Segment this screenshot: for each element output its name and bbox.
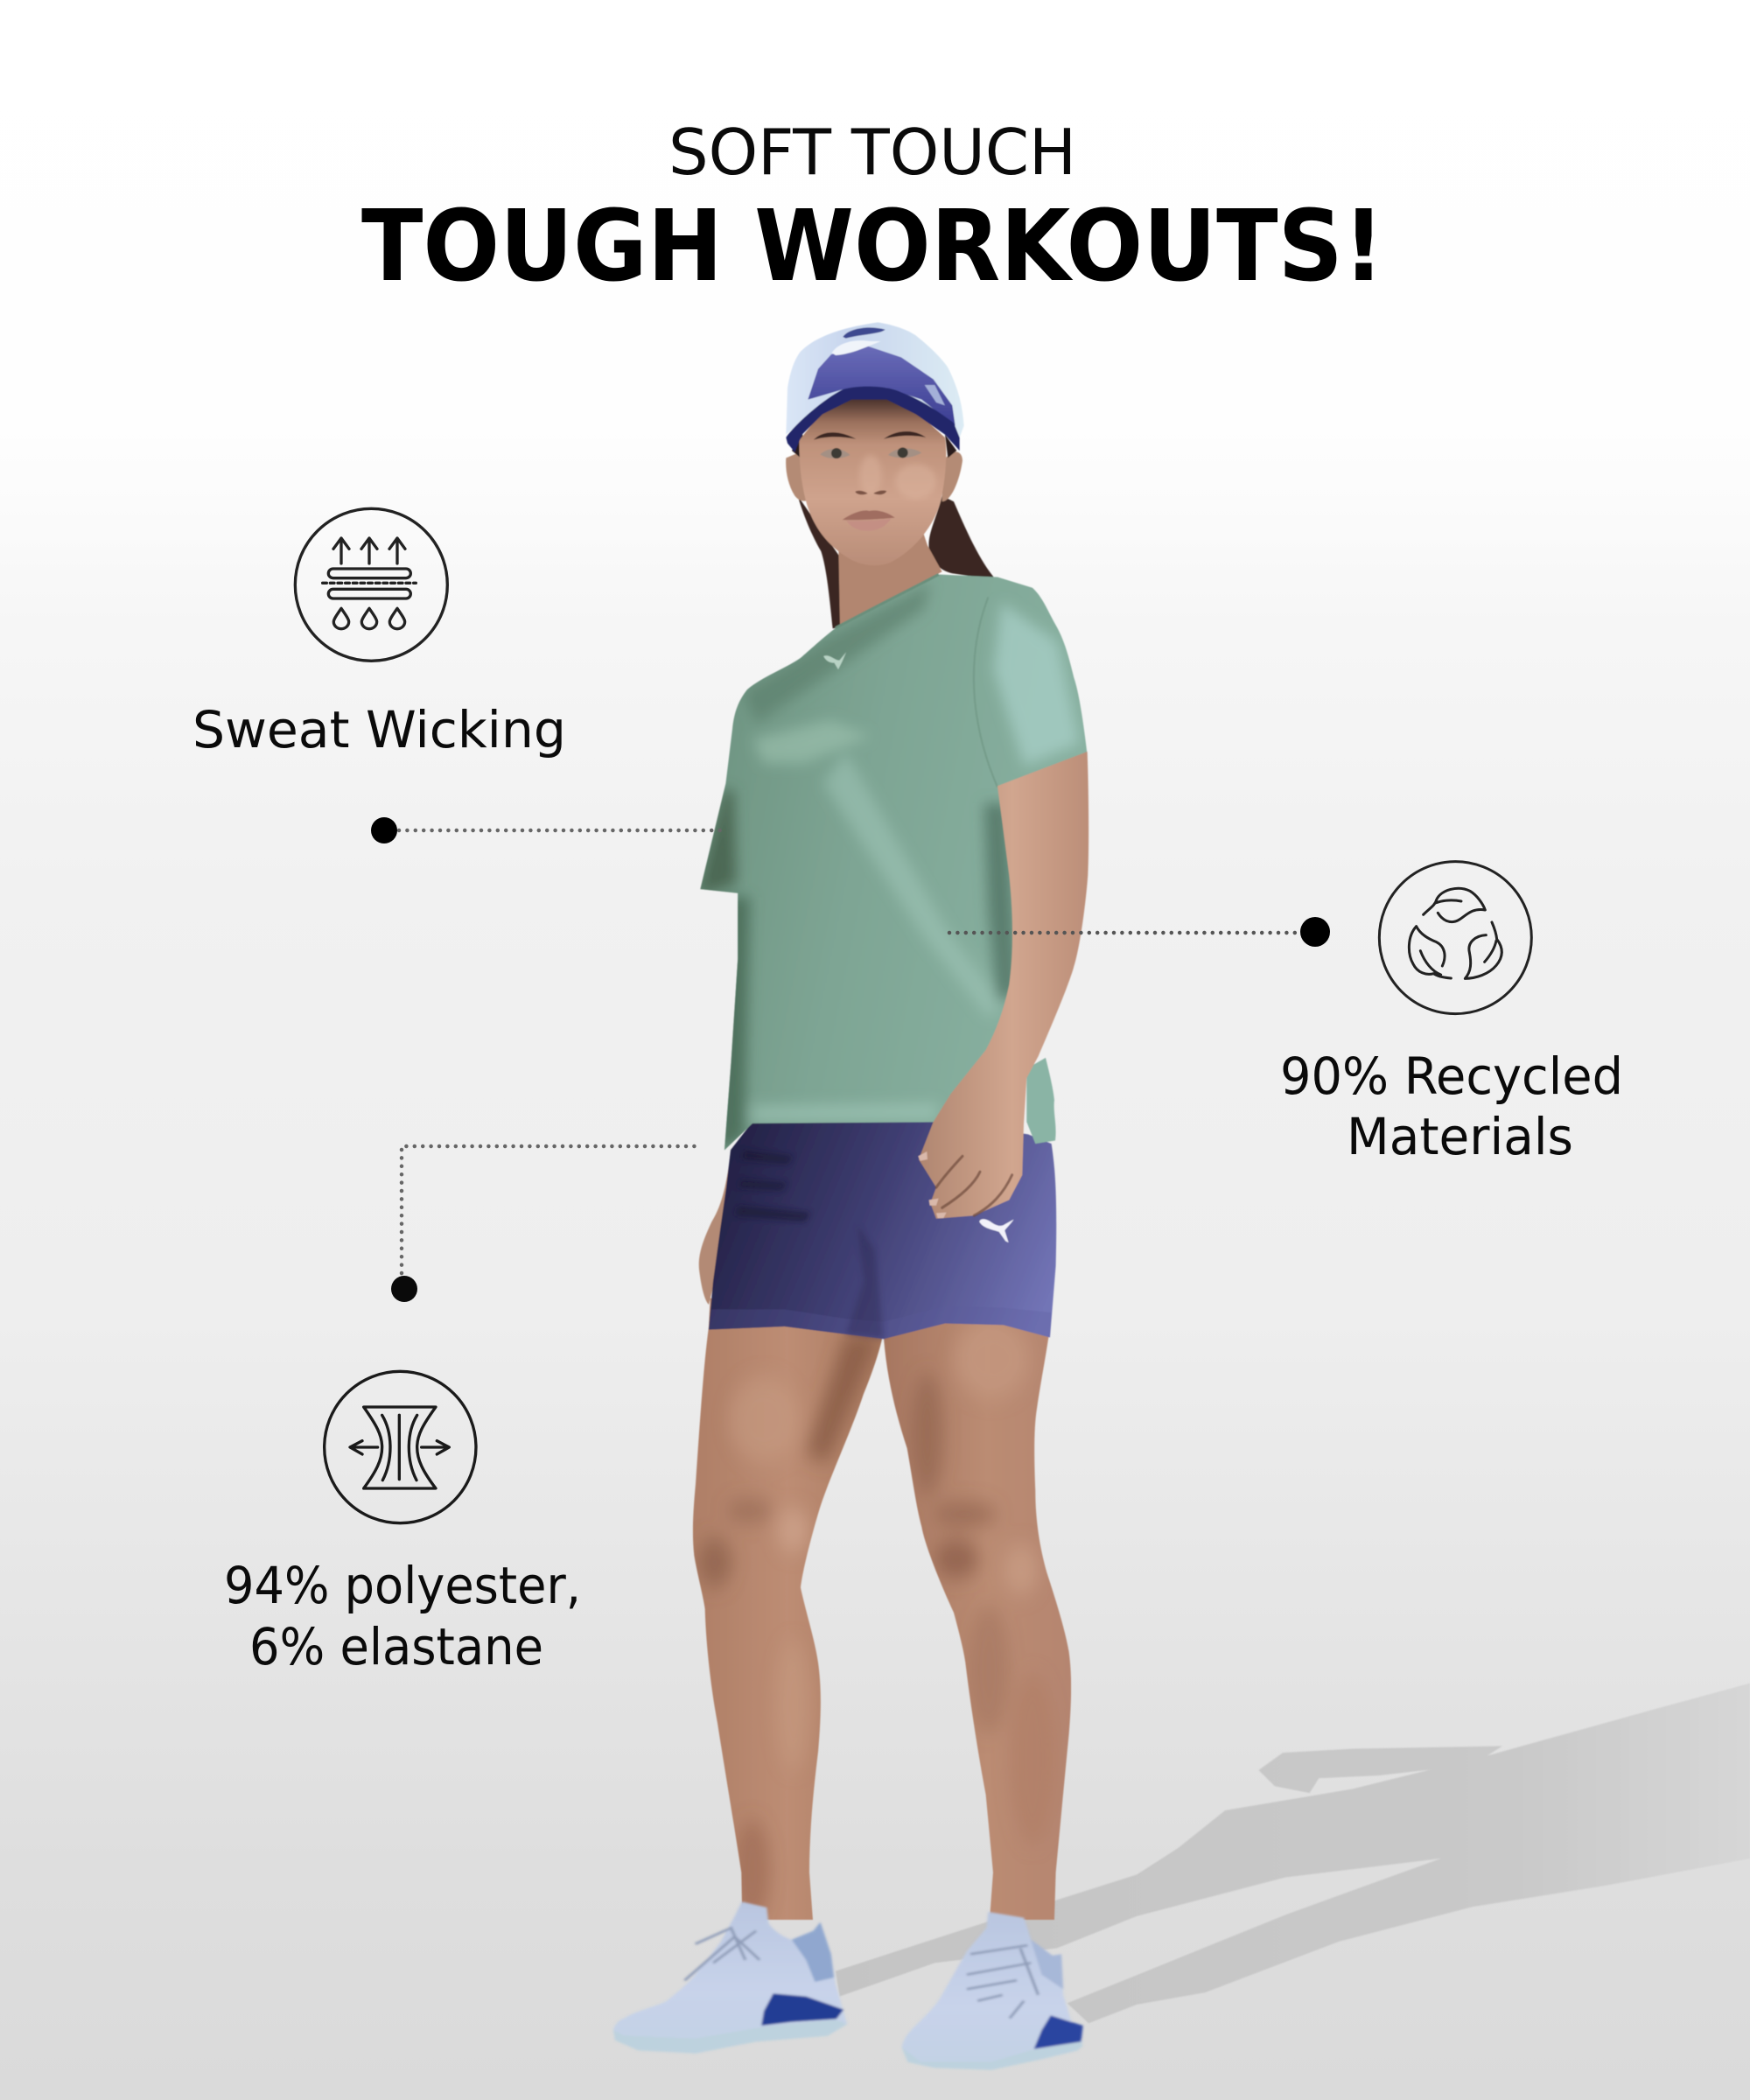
shirt tail behind arm <box>1026 1058 1056 1144</box>
cheek light <box>895 464 936 499</box>
knee crease <box>934 1503 998 1526</box>
chest highlight <box>752 720 871 763</box>
dotted line <box>399 829 723 832</box>
knee shadow <box>697 1537 732 1587</box>
shorts logo <box>979 1219 1014 1242</box>
label: sweat wicking: Sweat Wicking <box>192 700 566 760</box>
right iris <box>898 447 908 458</box>
arm <box>919 752 1088 1219</box>
nostrils <box>855 491 886 494</box>
second line: Materials <box>1347 1107 1573 1166</box>
left body shade <box>717 897 750 1152</box>
right leg base <box>881 1292 1074 1927</box>
back hand <box>699 1156 731 1305</box>
left shoe collar <box>792 1922 834 1982</box>
cap blue panel <box>808 346 956 426</box>
lower shin shadow <box>737 1822 772 1906</box>
eyebrows <box>814 431 926 440</box>
cap top logo <box>843 327 886 339</box>
dot marker <box>371 817 397 844</box>
icon: recycled leaves <box>1379 862 1531 1014</box>
cap dome <box>786 322 964 438</box>
thigh inner shadow <box>912 1373 943 1494</box>
second line: 6% elastane <box>249 1617 543 1676</box>
eyes <box>820 447 921 458</box>
lower lip <box>846 519 891 531</box>
inner thigh shadow <box>805 1334 881 1462</box>
nose highlight <box>859 455 882 496</box>
right leg <box>881 1292 1074 1927</box>
title line: tough workouts: TOUGH WORKOUTS! <box>361 190 1384 304</box>
left shoe sole <box>613 2020 847 2054</box>
icon: sweat wicking <box>295 508 447 661</box>
finger lines <box>936 1156 1012 1215</box>
left sleeve shade <box>696 790 737 897</box>
calf shade <box>970 1610 1008 1729</box>
knee shadow <box>934 1539 978 1578</box>
dotted line <box>949 931 1304 934</box>
right shoe <box>902 1912 1083 2070</box>
shirt chest logo <box>823 652 846 669</box>
arm and hand <box>918 752 1088 1219</box>
lower calf tone <box>1023 1746 1024 1773</box>
right shoe heel insert <box>1034 2015 1083 2049</box>
shorts leg gap <box>846 1225 884 1339</box>
dot marker <box>1300 917 1330 947</box>
shorts <box>709 1120 1056 1339</box>
knee crease <box>726 1499 773 1522</box>
floor shadow <box>836 1684 1750 2023</box>
model figure <box>613 322 1088 2070</box>
left shoe <box>613 1901 847 2054</box>
face <box>799 398 946 565</box>
shorts hem tone <box>709 1306 1052 1339</box>
left shoe heel insert <box>761 1993 844 2026</box>
finger nails <box>918 1152 947 1218</box>
shirt folds <box>696 583 1079 1152</box>
left shoe laces <box>684 1928 760 1980</box>
thigh highlight <box>956 1328 1024 1390</box>
left shoe upper <box>613 1901 847 2054</box>
right shoe collar <box>1024 1918 1063 1989</box>
shorts waist folds <box>735 1150 811 1222</box>
right shoe upper <box>902 1912 1083 2069</box>
cap brim <box>786 387 960 452</box>
knee highlight <box>777 1509 809 1551</box>
neck <box>838 528 942 628</box>
right shoe sole <box>902 2041 1083 2070</box>
diagonal fold <box>823 752 1003 1018</box>
head and cap <box>786 322 964 565</box>
sleeve seam <box>974 598 998 788</box>
title <box>361 116 1384 304</box>
first line: 90% Recycled <box>1280 1046 1623 1106</box>
first line: 94% polyester, <box>224 1556 581 1615</box>
icon: fabric stretch <box>325 1371 476 1523</box>
upper shadow <box>743 583 931 723</box>
right eye <box>888 448 921 458</box>
hem highlight <box>752 1103 937 1122</box>
cap white print <box>832 340 881 355</box>
left leg <box>682 1292 892 1927</box>
shorts body <box>709 1120 1056 1339</box>
upper lip <box>843 510 895 520</box>
label: recycled materials <box>1280 1046 1623 1166</box>
left iris <box>831 448 842 458</box>
shirt body <box>700 574 1088 1151</box>
right shoe laces <box>967 1945 1039 2019</box>
collar edge <box>836 574 939 628</box>
hair behind <box>798 496 996 628</box>
knee highlight <box>1006 1549 1036 1591</box>
dot marker <box>391 1276 417 1302</box>
calf highlight <box>789 1664 802 1746</box>
left leg base <box>692 1298 882 1921</box>
sleeve highlight <box>993 603 1079 766</box>
dotted line <box>402 1146 699 1273</box>
cap panel patch <box>925 385 945 405</box>
thigh highlight <box>732 1384 791 1454</box>
shoes <box>613 1901 1083 2070</box>
t-shirt <box>696 574 1088 1152</box>
leader line: fabric blend <box>391 1146 699 1302</box>
ears <box>786 451 962 501</box>
label: fabric blend <box>224 1556 581 1676</box>
leader line: sweat wicking <box>371 817 723 844</box>
hair at temples <box>792 431 956 461</box>
leader line: recycled materials <box>949 917 1330 947</box>
arm side shadow <box>984 803 1018 1004</box>
title line: soft touch: SOFT TOUCH <box>668 116 1076 189</box>
left eye <box>820 449 850 458</box>
